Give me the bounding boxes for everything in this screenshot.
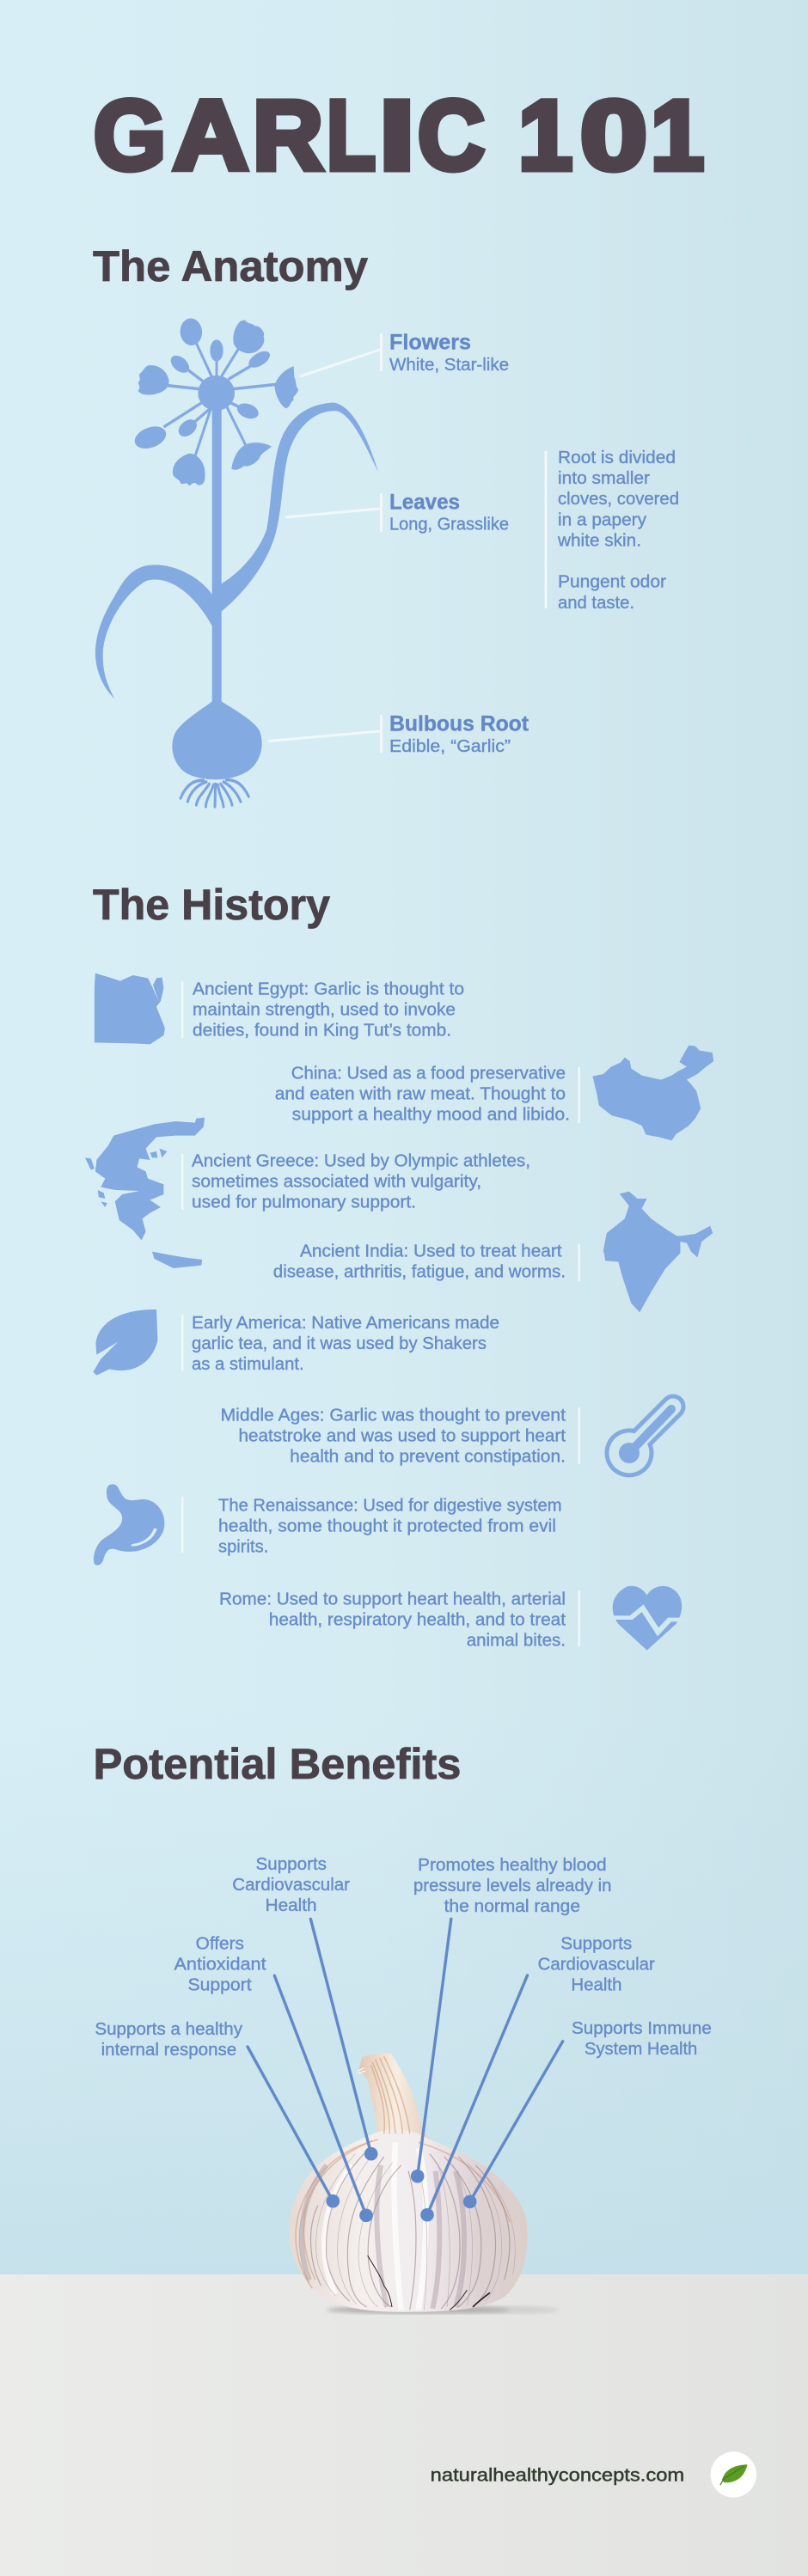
text: Ancient Egypt: Ancient Egypt: Garlic is thought to xyxy=(193,980,464,999)
text: The Renaissance xyxy=(181,1495,562,1556)
text block: root description xyxy=(545,448,679,613)
callout: Bulbous Root: Edible, “Garlic” xyxy=(389,736,511,756)
text: Ancient Greece: Ancient Greece: Used by Olympic athletes, xyxy=(192,1151,530,1171)
text block: root description: and taste. xyxy=(558,593,634,613)
icon: China map xyxy=(592,1046,713,1140)
callout: Leaves: Long, Grasslike xyxy=(389,514,509,534)
icon: logo leaf xyxy=(711,2451,756,2498)
label: Promotes healthy blood pressure: Promotes healthy blood xyxy=(418,1855,607,1875)
text block: root description: cloves, covered xyxy=(558,489,679,509)
text: China: and eaten with raw meat. Thought to xyxy=(275,1084,566,1104)
text: Early America: as a stimulant. xyxy=(192,1354,304,1374)
title: G xyxy=(94,81,166,191)
heading: Potential Benefits: Potential Benefits xyxy=(93,1740,461,1788)
label: Supports a healthy internal response: Supports a healthy xyxy=(95,2019,243,2039)
callout: Leaves: Leaves xyxy=(389,490,460,514)
callout: Flowers: Flowers xyxy=(389,330,471,354)
heading: The History: The History xyxy=(93,881,330,929)
label: Supports Immune System Health xyxy=(572,2018,712,2059)
title: 1 xyxy=(518,81,572,191)
text: Ancient India xyxy=(273,1241,580,1281)
text: Ancient India: Ancient India: Used to treat heart xyxy=(300,1241,562,1261)
text: Ancient Egypt: deities, found in King Tut’s tomb. xyxy=(193,1021,451,1041)
text: Early America: garlic tea, and it was used by Shakers xyxy=(192,1334,487,1353)
text: Early America xyxy=(181,1313,499,1374)
title: R xyxy=(253,81,323,191)
footer URL: naturalhealthyconcepts.com xyxy=(431,2465,684,2486)
text: Middle Ages: health and to prevent constipation. xyxy=(290,1446,566,1466)
title: L xyxy=(327,81,376,191)
callout: Bulbous Root: Bulbous Root xyxy=(389,712,529,736)
text: The Renaissance: health, some thought it protected from evil xyxy=(218,1516,556,1535)
title: C xyxy=(418,81,485,191)
bulb xyxy=(172,701,262,779)
callout: Flowers: White, Star-like xyxy=(389,355,509,375)
label: Supports Cardiovascular Health (left): Supports xyxy=(256,1854,327,1874)
flower cluster xyxy=(132,314,298,485)
text: The Renaissance: The Renaissance: Used for digestive system xyxy=(218,1495,562,1515)
text block: root description: white skin. xyxy=(557,531,641,550)
text: Ancient India: disease, arthritis, fatigue, and worms. xyxy=(273,1261,566,1281)
label: Supports Immune System Health: System Health xyxy=(585,2039,697,2059)
leader lines and markers xyxy=(248,1919,563,2222)
icon: thermometer xyxy=(607,1396,683,1475)
text: China: China: Used as a food preservative xyxy=(291,1064,566,1084)
title: 1 xyxy=(651,81,704,191)
label: Supports a healthy internal response: internal response xyxy=(101,2040,236,2060)
text: Ancient Greece xyxy=(181,1151,530,1212)
stem xyxy=(212,400,222,706)
label: Supports Cardiovascular Health (right): Cardiovascular xyxy=(538,1955,655,1975)
callout: Flowers xyxy=(300,330,509,376)
label: Promotes healthy blood pressure: pressure levels already in xyxy=(413,1876,611,1895)
icon: stomach xyxy=(94,1484,164,1566)
label: Supports a healthy internal response xyxy=(95,2019,243,2060)
label: Offers Antioxidant Support xyxy=(174,1934,266,1995)
icon: Greece map xyxy=(85,1118,205,1268)
text: Ancient Greece: used for pulmonary support. xyxy=(192,1193,416,1212)
callout: Bulbous Root xyxy=(268,712,529,756)
label: Promotes healthy blood pressure xyxy=(413,1855,611,1916)
text: Ancient Greece: sometimes associated with vulgarity, xyxy=(192,1172,481,1192)
text: Rome: health, respiratory health, and to treat xyxy=(269,1609,566,1629)
label: Offers Antioxidant Support: Antioxidant xyxy=(174,1955,266,1975)
label: Supports Cardiovascular Health (left): Cardiovascular xyxy=(232,1875,350,1895)
text: China: support a healthy mood and libido. xyxy=(292,1105,570,1125)
right leaf xyxy=(215,402,378,613)
icon: heart with pulse xyxy=(608,1586,687,1651)
icon: Egypt map xyxy=(95,974,165,1044)
text: Middle Ages: Middle Ages: Garlic was thought to prevent xyxy=(221,1405,566,1425)
text: Middle Ages xyxy=(221,1405,580,1466)
photo: garlic bulb xyxy=(289,2053,559,2314)
text block: root description: Pungent odor xyxy=(558,572,666,592)
roots xyxy=(181,780,248,807)
callout: Leaves xyxy=(285,490,509,534)
label: Supports Cardiovascular Health (right): Supports xyxy=(560,1934,632,1954)
icon: leaf xyxy=(93,1309,157,1376)
heading: The Anatomy: The Anatomy xyxy=(93,242,368,290)
text: Ancient Egypt xyxy=(181,980,464,1041)
label: Offers Antioxidant Support: Support xyxy=(187,1975,252,1995)
text block: root description: in a papery xyxy=(558,510,647,529)
left leaf xyxy=(95,565,217,699)
text block: root description: Root is divided xyxy=(558,448,676,467)
text: The Renaissance: spirits. xyxy=(218,1536,268,1556)
text: Rome: Rome: Used to support heart health, arterial xyxy=(219,1589,566,1608)
icon: India map xyxy=(603,1192,713,1312)
label: Offers Antioxidant Support: Offers xyxy=(196,1934,244,1954)
label: Promotes healthy blood pressure: the normal range xyxy=(444,1896,580,1916)
text: Rome: animal bites. xyxy=(467,1630,566,1650)
text block: root description: into smaller xyxy=(558,468,650,488)
text: Early America: Early America: Native Americans made xyxy=(192,1313,499,1333)
text: Ancient Egypt: maintain strength, used to invoke xyxy=(193,1000,456,1020)
label: Supports Cardiovascular Health (left) xyxy=(232,1854,350,1915)
title: A xyxy=(173,81,248,191)
text: Middle Ages: heatstroke and was used to support heart xyxy=(239,1425,566,1445)
label: Supports Cardiovascular Health (left): Health xyxy=(266,1895,317,1915)
label: Supports Cardiovascular Health (right) xyxy=(538,1934,655,1995)
diagram: garlic plant anatomy xyxy=(95,314,378,807)
label: Supports Cardiovascular Health (right): Health xyxy=(571,1975,622,1995)
title: I xyxy=(379,81,415,191)
label: Supports Immune System Health: Supports Immune xyxy=(572,2018,712,2038)
title: 0 xyxy=(580,81,647,191)
text: Rome xyxy=(219,1589,580,1650)
text: China xyxy=(275,1064,580,1125)
